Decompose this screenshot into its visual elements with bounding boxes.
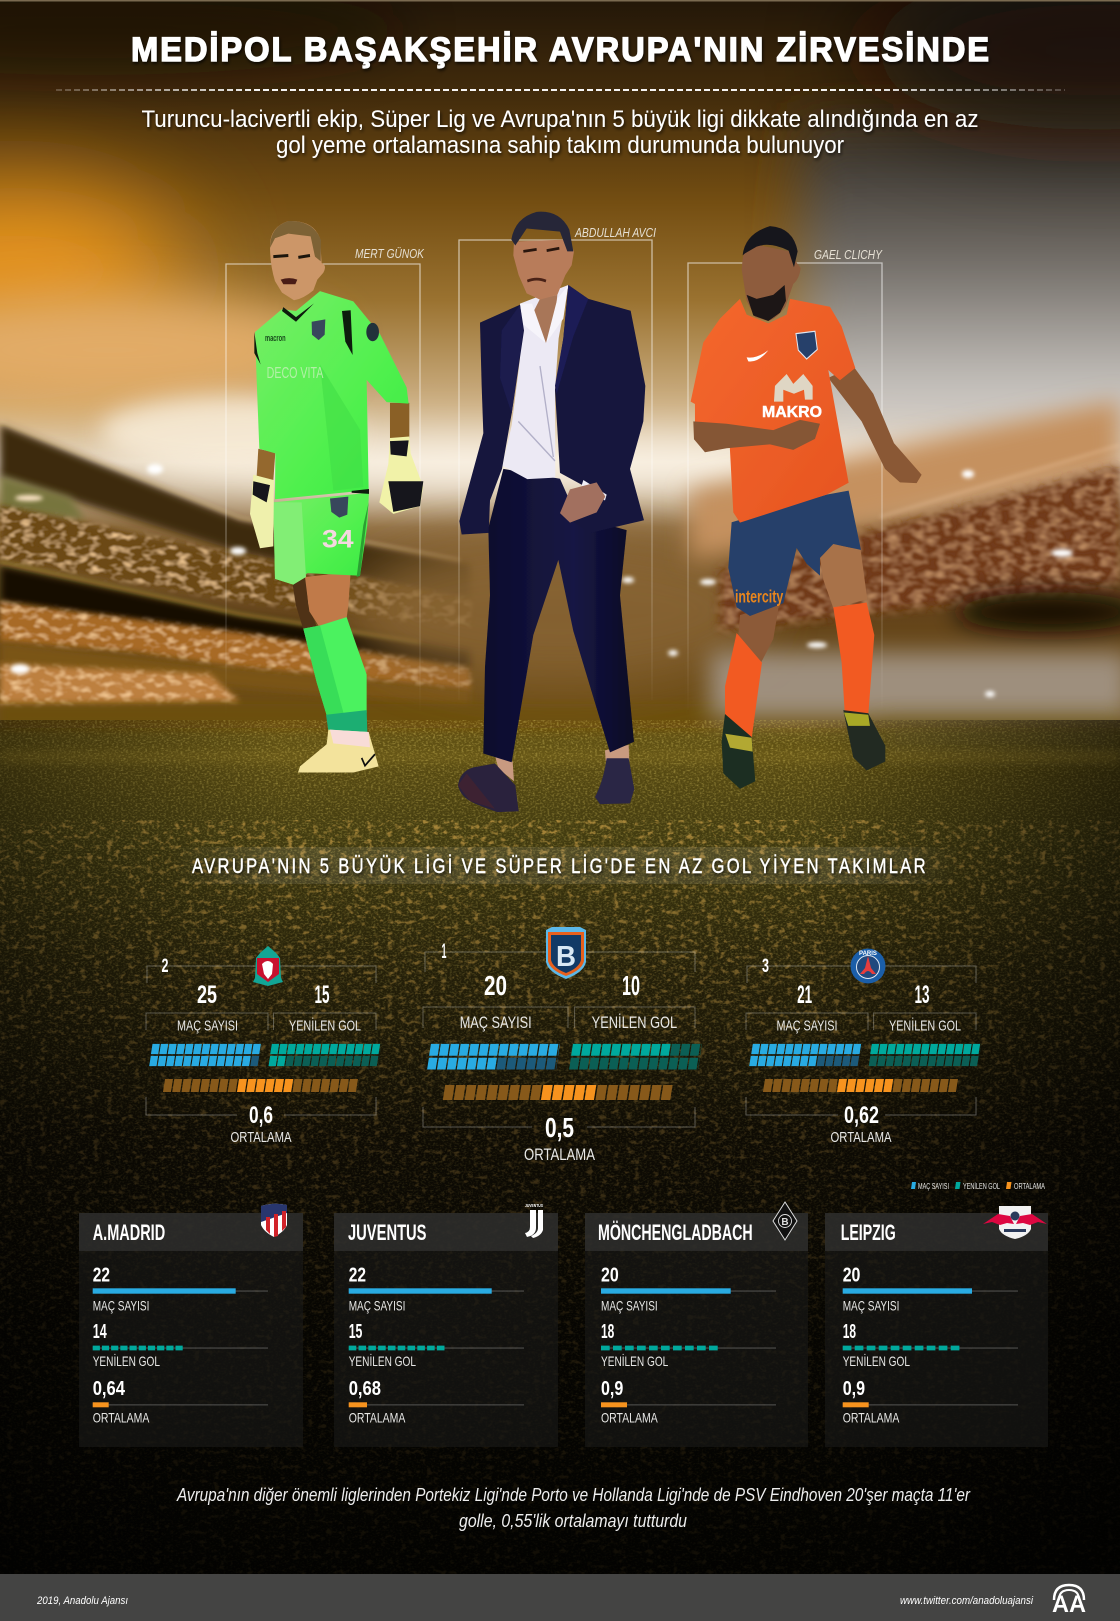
footer bar — [0, 1574, 1120, 1621]
subtitle — [142, 106, 978, 159]
right stand tiers — [690, 400, 1120, 752]
panel: Leipzig: ORTALAMA — [843, 1410, 900, 1426]
team block: PSG, rank 3 — [746, 948, 980, 1146]
legend: ORTALAMA — [1014, 1182, 1045, 1191]
legend: MAÇ SAYISI — [918, 1182, 949, 1191]
credit: 2019, Anadolu Ajansı — [36, 1595, 128, 1607]
subtitle: gol yeme ortalamasına sahip takım durumunda bulunuyor — [276, 132, 844, 159]
stat: matches: 22 — [349, 1265, 366, 1287]
icon: Başakşehir crest — [546, 927, 586, 979]
icon: Gladbach crest: B — [781, 1217, 789, 1228]
label: matches: MAÇ SAYISI — [460, 1013, 532, 1032]
figure: goalkeeper Mert Günok: 34 — [322, 526, 355, 554]
stat: goals conceded: 15 — [349, 1321, 362, 1343]
team block: Başakşehir, rank 1: 1 — [442, 940, 447, 963]
team name: A.MADRID — [93, 1220, 165, 1245]
figure: defender Gael Clichy: intercity — [735, 587, 783, 607]
name frame: Gael Clichy — [688, 263, 882, 710]
subtitle: Turuncu-lacivertli ekip, Süper Lig ve Avrupa'nın 5 büyük ligi dikkate alındığında en az — [142, 106, 978, 133]
icon: Leipzig crest — [983, 1206, 1047, 1239]
icon: AA logo: AA — [1052, 1591, 1086, 1618]
stat: goals conceded: 18 — [601, 1321, 614, 1343]
orange average bars — [444, 1085, 673, 1100]
title: MEDİPOL BAŞAKŞEHİR AVRUPA'NIN ZİRVESİNDE — [131, 31, 991, 69]
orange average bars — [164, 1079, 358, 1092]
label: average: ORTALAMA — [830, 1130, 892, 1146]
panel: A.Madrid — [79, 1204, 303, 1447]
label: matches: MAÇ SAYISI — [776, 1018, 838, 1034]
stat: matches: 20 — [843, 1265, 860, 1287]
team name: LEIPZIG — [841, 1220, 896, 1245]
panel: Juventus: ORTALAMA — [349, 1410, 406, 1426]
label: Gael Clichy: GAEL CLICHY — [814, 247, 883, 262]
stat: matches 25: 25 — [197, 981, 217, 1009]
blue match bars — [750, 1049, 862, 1061]
centre haze — [350, 535, 770, 685]
stat: goals 10: 10 — [622, 970, 640, 1001]
teal goal bars — [870, 1049, 980, 1061]
icon: Juventus logo — [525, 1203, 543, 1238]
panel: Leipzig — [825, 1206, 1048, 1447]
orange average bars — [764, 1079, 958, 1092]
label: goals conceded: YENİLEN GOL — [889, 1016, 961, 1034]
stadium lights — [10, 464, 1073, 697]
label: average: ORTALAMA — [524, 1145, 596, 1164]
left stand tiers — [0, 421, 1120, 728]
figure: defender Gael Clichy — [691, 226, 922, 789]
icon: PSG crest: PARIS — [859, 951, 877, 957]
stat: matches 20: 20 — [484, 970, 507, 1001]
blue match bars — [428, 1050, 559, 1064]
teal goal bars — [570, 1050, 701, 1064]
section heading: AVRUPA'NIN 5 BÜYÜK LİGİ VE SÜPER LİG'DE EN AZ GOL YİYEN TAKIMLAR — [192, 855, 928, 878]
legend — [911, 1182, 1045, 1191]
panel: Juventus: YENİLEN GOL — [349, 1352, 416, 1369]
team name: MÖNCHENGLADBACH — [598, 1220, 753, 1245]
team block: Başakşehir, rank 1 — [423, 927, 701, 1164]
icon: Başakşehir crest: B — [556, 941, 576, 973]
icon: Atletico crest — [261, 1204, 287, 1237]
label: goals conceded: YENİLEN GOL — [592, 1013, 677, 1032]
closing note: Avrupa'nın diğer önemli liglerinden Portekiz Ligi'nde Porto ve Hollanda Ligi'nde de PSV Eindhoven 20'şer maçta 11'er — [176, 1485, 971, 1505]
social link: www.twitter.com/anadoluajansi — [900, 1595, 1033, 1607]
panel: Juventus — [334, 1203, 558, 1447]
figure: goalkeeper Mert Günok: macron — [265, 333, 286, 343]
panel: Leipzig: MAÇ SAYISI — [843, 1298, 899, 1314]
label: average: ORTALAMA — [230, 1130, 292, 1146]
stat: goals 15: 15 — [314, 981, 330, 1009]
icon: Juventus logo: JUVENTUS — [525, 1203, 543, 1208]
section heading band — [170, 847, 960, 884]
panel: Mönchengladbach: MAÇ SAYISI — [601, 1298, 658, 1314]
label: goals conceded: YENİLEN GOL — [289, 1016, 361, 1034]
teal goal bars — [269, 1049, 380, 1061]
panel: Leipzig: YENİLEN GOL — [843, 1352, 910, 1369]
panel: Mönchengladbach — [585, 1202, 808, 1447]
label: Mert Günok: MERT GÜNOK — [355, 246, 425, 261]
team block: Liverpool, rank 2 — [146, 946, 380, 1146]
rank number 2: 2 — [162, 956, 168, 977]
stat: average: 0,9 — [601, 1378, 623, 1400]
stat: average: 0,64 — [93, 1378, 126, 1400]
stat: average: 0,68 — [349, 1378, 381, 1400]
panel: A.Madrid: MAÇ SAYISI — [93, 1298, 149, 1314]
figure: goalkeeper Mert Günok — [250, 221, 423, 773]
stat: goals conceded: 18 — [843, 1321, 856, 1343]
icon: Liverpool crest — [253, 946, 283, 986]
figure: goalkeeper Mert Günok: DECO VITA — [267, 364, 324, 382]
panel: A.Madrid: ORTALAMA — [93, 1410, 150, 1426]
panel: Juventus: MAÇ SAYISI — [349, 1298, 405, 1314]
closing note: golle, 0,55'lik ortalamayı tutturdu — [459, 1511, 687, 1531]
icon: Gladbach crest — [773, 1202, 797, 1240]
blue match bars — [150, 1049, 261, 1061]
stat: goals 13: 13 — [914, 981, 930, 1009]
stat: average 0,5: 0,5 — [545, 1112, 574, 1143]
label: Abdullah Avcı: ABDULLAH AVCI — [574, 225, 656, 240]
stat: goals conceded: 14 — [93, 1321, 107, 1343]
legend: YENİLEN GOL — [963, 1182, 1000, 1191]
name frame: Mert Günok — [226, 264, 420, 715]
stat: matches 21: 21 — [797, 981, 812, 1009]
dashed title divider — [56, 89, 1065, 91]
stat: average 0,62: 0,62 — [844, 1102, 879, 1129]
rank number 3: 3 — [762, 956, 769, 977]
label: matches: MAÇ SAYISI — [177, 1018, 238, 1034]
pitch grass texture — [0, 720, 1120, 1574]
team name: JUVENTUS — [348, 1220, 426, 1245]
stat: matches: 20 — [601, 1265, 619, 1287]
name frame: Abdullah Avcı — [459, 240, 652, 700]
closing note — [176, 1485, 971, 1531]
icon: PSG crest — [850, 948, 886, 984]
panel: Mönchengladbach: ORTALAMA — [601, 1410, 658, 1426]
panel: A.Madrid: YENİLEN GOL — [93, 1352, 160, 1369]
stat: average: 0,9 — [843, 1378, 865, 1400]
stat: matches: 22 — [93, 1265, 110, 1287]
stat: average 0,6: 0,6 — [249, 1102, 273, 1129]
panel: Mönchengladbach: YENİLEN GOL — [601, 1352, 668, 1369]
figure: defender Gael Clichy: MAKRO — [762, 404, 822, 421]
figure: manager Abdullah Avcı — [458, 212, 645, 812]
